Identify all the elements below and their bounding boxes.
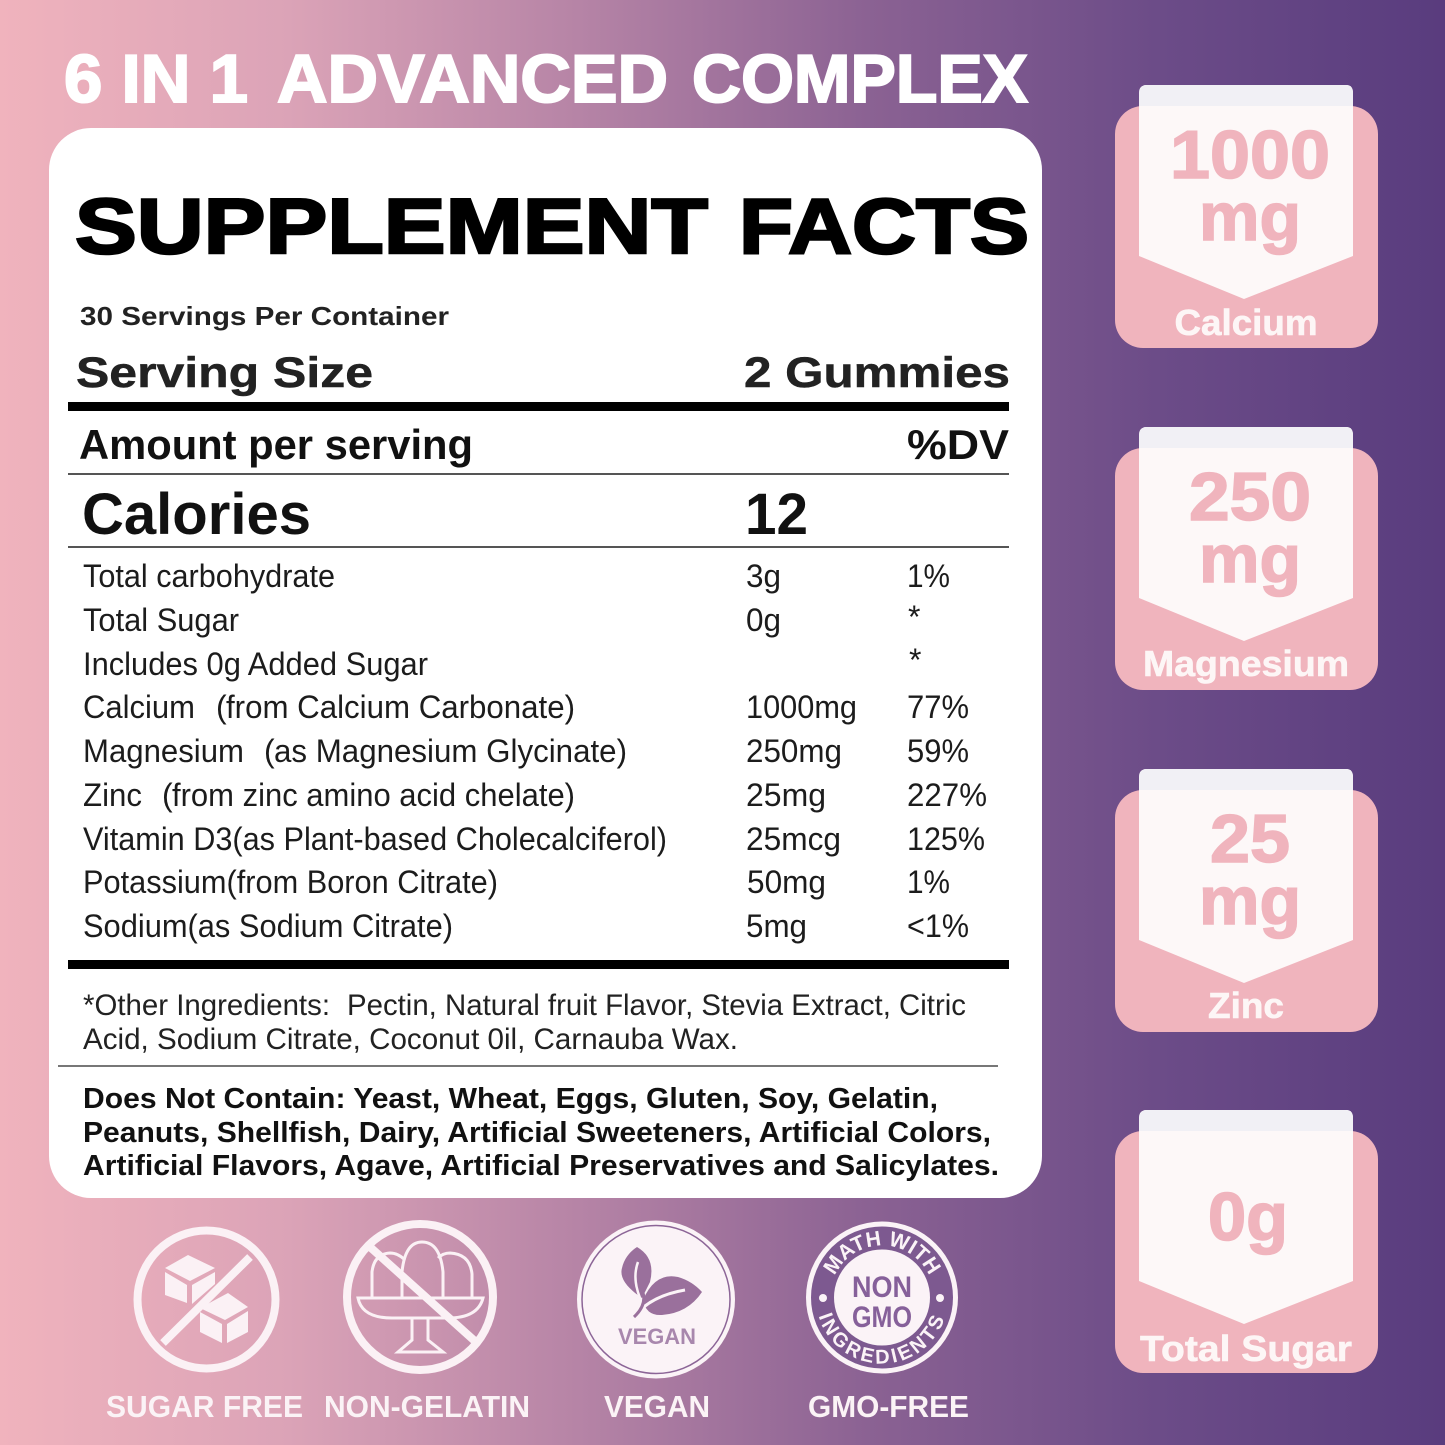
- title: 6 IN 1: [64, 41, 248, 117]
- title: [64, 41, 1028, 117]
- badge labels: GMO-FREE: [808, 1389, 969, 1424]
- nutrient table: Includes 0g Added Sugar: [83, 646, 428, 682]
- calories row: 12: [745, 482, 808, 547]
- icon: non-gmo: MATH WITH: [823, 1230, 941, 1274]
- nutrient table: [83, 558, 987, 944]
- icon: non-gmo: INGREDIENTS: [819, 1312, 944, 1364]
- card: calcium: Calcium: [1174, 302, 1318, 343]
- nutrient table: 0g: [746, 602, 781, 638]
- nutrient table: Calcium: [83, 689, 195, 725]
- nutrient table: 125%: [907, 821, 985, 857]
- card: calcium: 1000: [1170, 117, 1330, 193]
- nutrient table: 5mg: [746, 908, 807, 944]
- serving size row: [76, 349, 1010, 397]
- serving size row: Serving Size: [76, 349, 373, 397]
- icon: non-gmo: [806, 1222, 958, 1374]
- nutrient table: 50mg: [747, 864, 826, 900]
- other ingredients: Pectin, Natural fruit Flavor, Stevia Extract, Citric: [347, 989, 966, 1022]
- does not contain: [83, 1083, 999, 1182]
- nutrient table: 25mg: [746, 777, 826, 813]
- amount per serving row: %DV: [907, 421, 1009, 468]
- does not contain: Peanuts, Shellfish, Dairy, Artificial Sweeteners, Artificial Colors,: [83, 1117, 991, 1149]
- nutrient table: 1%: [907, 864, 950, 900]
- calories row: Calories: [82, 482, 311, 547]
- nutrient table: Total Sugar: [83, 602, 239, 638]
- nutrient table: 77%: [907, 689, 969, 725]
- title: COMPLEX: [692, 41, 1028, 117]
- nutrient table: (: [264, 733, 275, 769]
- calories row: [82, 482, 808, 547]
- servings per container: 30 Servings Per Container: [80, 301, 449, 331]
- card: calcium: mg: [1199, 179, 1301, 255]
- nutrient table: 227%: [907, 777, 987, 813]
- amount per serving row: [79, 421, 1009, 468]
- amount per serving row: Amount per serving: [79, 421, 473, 468]
- nutrient table: <1%: [907, 908, 969, 944]
- nutrient table: Zinc: [83, 777, 142, 813]
- nutrient table: *: [908, 599, 920, 635]
- card: magnesium: mg: [1199, 521, 1301, 597]
- panel: supplement facts: [49, 128, 1042, 1198]
- nutrient table: Potassium(from Boron Citrate): [83, 864, 498, 900]
- icon: vegan: [577, 1220, 735, 1378]
- card: zinc: 25: [1210, 801, 1290, 877]
- nutrient table: (: [216, 689, 227, 725]
- badge labels: [106, 1389, 969, 1424]
- icon: non-gelatin: [347, 1224, 493, 1370]
- nutrient table: 3g: [746, 558, 781, 594]
- icon: non-gmo: NON: [852, 1271, 912, 1304]
- nutrient table: Vitamin D3(as Plant-based Cholecalciferol): [83, 821, 667, 857]
- badge labels: VEGAN: [604, 1389, 710, 1424]
- heading: supplement facts: SUPPLEMENT: [75, 182, 708, 270]
- nutrient table: 59%: [907, 733, 969, 769]
- nutrient table: 1000mg: [746, 689, 857, 725]
- heading: supplement facts: FACTS: [739, 182, 1029, 270]
- card: zinc: [1115, 769, 1378, 1032]
- card: magnesium: Magnesium: [1143, 643, 1349, 684]
- card: magnesium: [1115, 427, 1378, 690]
- nutrient table: (: [162, 777, 173, 813]
- badge labels: SUGAR FREE: [106, 1389, 303, 1424]
- other ingredients: [83, 989, 966, 1056]
- does not contain: Artificial Flavors, Agave, Artificial Preservatives and Salicylates.: [83, 1150, 999, 1182]
- nutrient table: as Magnesium Glycinate): [274, 733, 627, 769]
- nutrient table: Total carbohydrate: [83, 558, 335, 594]
- serving size row: 2 Gummies: [744, 349, 1010, 397]
- nutrient table: from Calcium Carbonate): [226, 689, 575, 725]
- does not contain: Does Not Contain: Yeast, Wheat, Eggs, Gluten, Soy, Gelatin,: [83, 1083, 938, 1115]
- icon: vegan: VEGAN: [618, 1324, 696, 1349]
- card: total sugar: [1115, 1110, 1378, 1373]
- icon: non-gmo: GMO: [852, 1301, 912, 1334]
- nutrient table: 250mg: [746, 733, 842, 769]
- card: zinc: Zinc: [1208, 985, 1284, 1026]
- icon: sugar free: [138, 1230, 276, 1368]
- nutrient table: Magnesium: [83, 733, 244, 769]
- nutrient table: 25mcg: [746, 821, 841, 857]
- heading: supplement facts: [75, 182, 1029, 270]
- nutrient table: from zinc amino acid chelate): [172, 777, 575, 813]
- nutrient table: 1%: [907, 558, 950, 594]
- card: total sugar: 0g: [1208, 1179, 1288, 1255]
- title: ADVANCED: [277, 41, 668, 117]
- badge labels: NON-GELATIN: [324, 1389, 530, 1424]
- card: total sugar: Total Sugar: [1140, 1328, 1352, 1369]
- other ingredients: *Other Ingredients:: [83, 989, 330, 1022]
- nutrient table: Sodium(as Sodium Citrate): [83, 908, 453, 944]
- card: magnesium: 250: [1189, 459, 1311, 535]
- other ingredients: Acid, Sodium Citrate, Coconut 0il, Carnauba Wax.: [83, 1023, 738, 1056]
- card: calcium: [1115, 85, 1378, 348]
- nutrient table: *: [909, 642, 921, 678]
- card: zinc: mg: [1199, 863, 1301, 939]
